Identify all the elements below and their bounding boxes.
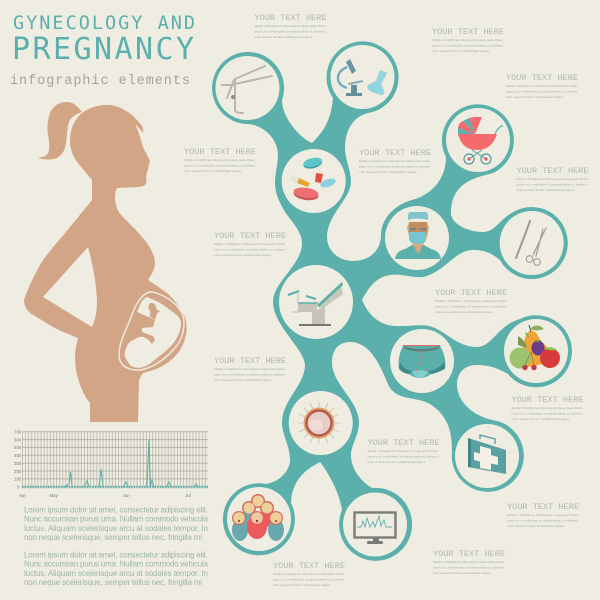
text block 8: Ideally of fringilla leo. Maecenas in cursus quam. Etiam <box>214 367 285 371</box>
subtitle: infographic elements <box>10 74 190 89</box>
text block 2: YOUR TEXT HERE <box>432 27 504 37</box>
text block 11 <box>368 438 440 464</box>
icon: egg cell <box>298 402 341 444</box>
text block 13: YOUR TEXT HERE <box>507 502 579 512</box>
text block 8: YOUR TEXT HERE <box>214 356 286 366</box>
text block 6: YOUR TEXT HERE <box>359 148 431 158</box>
text block 13: Ideally of fringilla leo. Maecenas in cursus quam. Etiam <box>507 513 578 517</box>
text block 7: purus orci, vestibulum, accumsan metus at, euismod <box>214 248 285 252</box>
text block 13: purus orci, vestibulum, accumsan metus at, euismod <box>507 518 578 524</box>
text block 14: YOUR TEXT HERE <box>433 549 505 559</box>
text block 9: purus orci, vestibulum, accumsan metus at, euismod <box>435 304 506 310</box>
chart axis labels: Jun <box>122 493 130 498</box>
text block 10: YOUR TEXT HERE <box>512 395 584 405</box>
text block 1: purus orci, vestibulum, accumsan metus at, euismod <box>254 30 326 34</box>
womb outline <box>119 292 184 370</box>
text block 8 <box>214 356 286 382</box>
text block 11: purus orci, vestibulum, accumsan metus at, euismod <box>368 454 439 460</box>
text block 10 <box>512 395 584 421</box>
text block 9: YOUR TEXT HERE <box>435 288 507 298</box>
chart axis labels: 700 <box>14 430 22 434</box>
text block 3: YOUR TEXT HERE <box>506 73 578 83</box>
paragraph 2: Lorem ipsum dolor sit amet, consectetur adipiscing elit. <box>24 550 208 560</box>
icon: pills <box>290 156 337 202</box>
text block 3: velit. Aenean dictum condimentum tempor. <box>506 95 564 99</box>
text block 6: purus orci, vestibulum, accumsan metus at, euismod <box>359 164 430 170</box>
text block 3: purus orci, vestibulum, accumsan metus at, euismod <box>506 90 577 94</box>
text block 4: velit. Aenean dictum condimentum tempor. <box>516 188 575 192</box>
text block 5 <box>184 147 256 173</box>
title: GYNECOLOGY AND <box>13 13 195 34</box>
text block 9: velit. Aenean dictum condimentum tempor. <box>435 310 493 314</box>
text block 2: Ideally of fringilla leo. Maecenas in cursus quam. Etiam <box>432 38 503 42</box>
womb interior with fetus <box>125 297 181 368</box>
text block 5: YOUR TEXT HERE <box>184 147 256 157</box>
text block 9 <box>435 288 507 314</box>
chart axis labels: 200 <box>14 469 22 474</box>
icon: first aid kit <box>468 435 506 474</box>
paragraph 1: non neque scelerisque, semper tellus nec, fringilla mi <box>24 533 202 542</box>
paragraph 1 <box>24 506 209 542</box>
icon: surgical tools <box>516 221 546 265</box>
chart axis labels: Apr <box>19 493 26 498</box>
icon: monitor <box>354 512 396 544</box>
text block 10: velit. Aenean dictum condimentum tempor. <box>512 417 570 421</box>
paragraph 2 <box>24 550 209 587</box>
text block 1: YOUR TEXT HERE <box>254 13 326 23</box>
text block 3 <box>506 73 578 99</box>
text block 10: Ideally of fringilla leo. Maecenas in cursus quam. Etiam <box>512 406 583 410</box>
text block 12: YOUR TEXT HERE <box>273 561 345 571</box>
text block 4 <box>516 166 588 192</box>
text block 4: YOUR TEXT HERE <box>516 166 588 176</box>
text block 2: purus orci, vestibulum, accumsan metus at, euismod <box>432 44 503 48</box>
text block 4: purus orci, vestibulum, accumsan metus at, euismod <box>516 182 588 188</box>
icon: fruits <box>510 325 560 370</box>
silhouette of pregnant woman <box>24 102 187 422</box>
title: PREGNANCY <box>12 32 194 67</box>
paragraph 2: Nunc accumsan purus urna. Nullam commodo vehicula <box>24 560 209 568</box>
text block 4: Ideally of fringilla leo. Maecenas in cursus quam. Etiam <box>516 177 588 181</box>
paragraph 1: Nunc accumsan purus urna. Nullam commodo vehicula <box>24 514 209 524</box>
text block 14: velit. Aenean dictum condimentum tempor. <box>433 571 491 575</box>
icon circles <box>216 45 568 556</box>
text block 7: YOUR TEXT HERE <box>214 231 286 241</box>
ponytail <box>38 102 82 160</box>
text block 2 <box>432 27 504 53</box>
text block 14 <box>433 549 505 575</box>
text block 3: Ideally of fringilla leo. Maecenas in cursus quam. Etiam <box>506 84 577 88</box>
text block 10: purus orci, vestibulum, accumsan metus at, euismod <box>512 412 583 416</box>
text block 12: Ideally of fringilla leo. Maecenas in cursus quam. Etiam <box>273 572 344 576</box>
line chart <box>14 430 208 498</box>
icon: babies <box>232 494 284 541</box>
paragraph 1: luctus. Aliquam scelerisque arcu at sodales tempor. In <box>24 524 208 533</box>
fetus head <box>148 303 160 320</box>
text block 11: Ideally of fringilla leo. Maecenas in cursus quam. Etiam <box>368 449 439 453</box>
chart axis labels: 600 <box>14 437 22 442</box>
text block 11: YOUR TEXT HERE <box>368 438 440 448</box>
icon: examination chair <box>288 282 343 326</box>
icon: microscope <box>338 59 387 96</box>
text block 2: velit. Aenean dictum condimentum tempor. <box>432 49 490 53</box>
chart axis labels: 300 <box>14 461 22 466</box>
text block 8: velit. Aenean dictum condimentum tempor. <box>214 378 272 382</box>
text block 12 <box>273 561 345 587</box>
chart axis labels <box>14 430 191 498</box>
chart axis labels: 400 <box>14 453 22 458</box>
text block 1: Ideally of fringilla leo. Maecenas in cursus quam. Etiam <box>254 24 326 28</box>
text block 6: velit. Aenean dictum condimentum tempor. <box>359 170 417 174</box>
icon: speculum <box>222 66 272 113</box>
icon: baby stroller <box>458 117 503 164</box>
chart axis labels: 0 <box>17 484 20 490</box>
text block 5: Ideally of fringilla leo. Maecenas in cursus quam. Etiam <box>184 158 255 162</box>
icon: doctor <box>395 212 441 259</box>
text block 12: velit. Aenean dictum condimentum tempor. <box>273 583 331 587</box>
text block 14: Ideally of fringilla leo. Maecenas in cursus quam. Etiam <box>433 560 504 564</box>
text block 12: purus orci, vestibulum, accumsan metus at, euismod <box>273 578 344 582</box>
text block 6 <box>359 148 431 174</box>
text block 5: purus orci, vestibulum, accumsan metus at, euismod <box>184 164 255 168</box>
text block 14: purus orci, vestibulum, accumsan metus at, euismod <box>433 566 504 570</box>
chart grid <box>22 432 208 487</box>
text block 7: velit. Aenean dictum condimentum tempor. <box>214 253 272 257</box>
text block 9: Ideally of fringilla leo. Maecenas in cursus quam. Etiam <box>435 299 506 303</box>
text block 6: Ideally of fringilla leo. Maecenas in cursus quam. Etiam <box>359 159 430 163</box>
paragraph 2: non neque scelerisque, semper tellus nec, fringilla mi <box>24 578 202 587</box>
network shape <box>212 41 572 561</box>
chart line <box>22 440 208 487</box>
title <box>12 13 195 67</box>
text block 1 <box>254 13 326 39</box>
paragraph 1: Lorem ipsum dolor sit amet, consectetur adipiscing elit. <box>24 506 208 514</box>
text block 5: velit. Aenean dictum condimentum tempor. <box>184 169 242 173</box>
chart axis labels: 500 <box>14 445 22 450</box>
text block 7: Ideally of fringilla leo. Maecenas in cursus quam. Etiam <box>214 242 285 246</box>
chart axis labels: May <box>50 493 59 498</box>
chart axis labels: 100 <box>14 477 22 482</box>
text block 7 <box>214 231 286 257</box>
icon: underwear <box>398 346 445 378</box>
paragraph 2: luctus. Aliquam scelerisque arcu at sodales tempor. In <box>24 569 208 578</box>
text block 1: velit. Aenean dictum condimentum tempor. <box>254 35 313 39</box>
text block 13: velit. Aenean dictum condimentum tempor. <box>507 524 565 528</box>
text block 8: purus orci, vestibulum, accumsan metus at, euismod <box>214 372 285 378</box>
text block 11: velit. Aenean dictum condimentum tempor. <box>368 460 426 464</box>
text block 13 <box>507 502 579 528</box>
flask <box>368 70 387 95</box>
chart axis labels: Jul <box>185 493 191 498</box>
